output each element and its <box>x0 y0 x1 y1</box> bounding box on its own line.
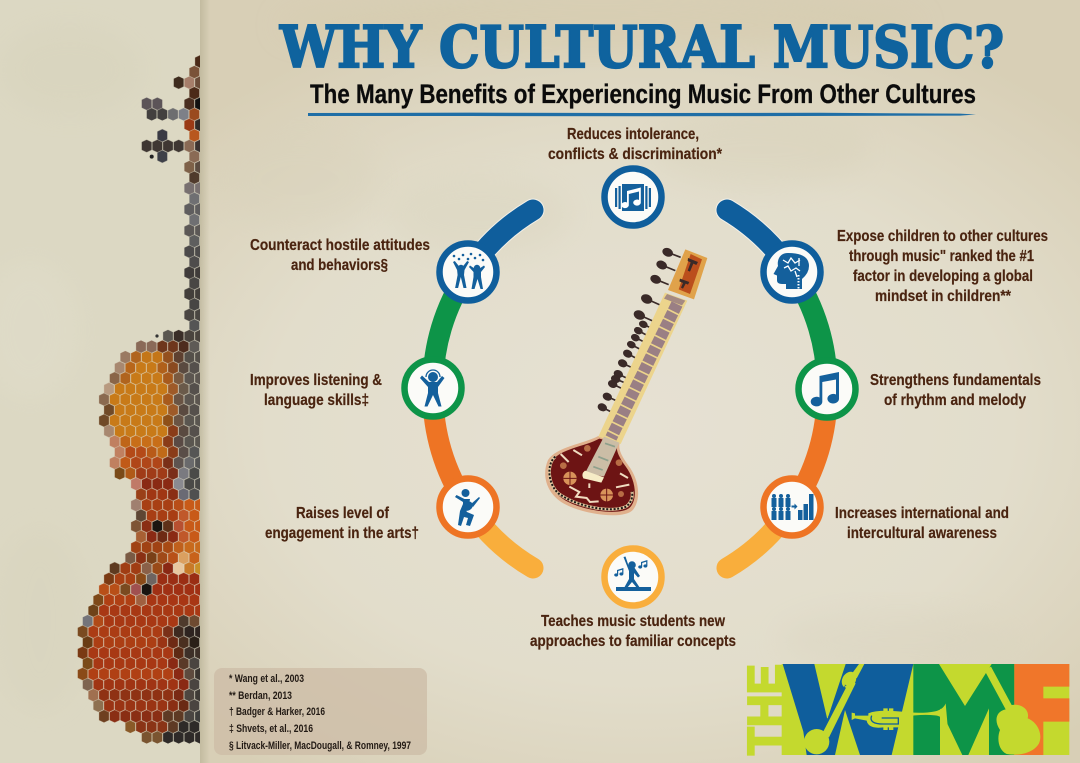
neck <box>598 293 687 444</box>
text: improves listening: Improves listening & <box>250 372 382 389</box>
text: improves listening <box>250 372 382 409</box>
text: raises engagement: engagement in the arts† <box>265 525 419 542</box>
text: increases awareness: Increases international and <box>835 505 1009 522</box>
text: strengthens fundamentals: of rhythm and melody <box>884 392 1026 409</box>
icon: head with brain <box>764 244 820 300</box>
text: improves listening: language skills‡ <box>264 392 369 409</box>
icon: music note <box>798 360 856 418</box>
references panel: ‡ Shvets, et al., 2016 <box>229 723 313 735</box>
text: strengthens fundamentals <box>870 372 1041 409</box>
logo: F <box>1014 664 1069 755</box>
logo: guitar <box>984 667 1040 755</box>
text: raises engagement <box>265 505 419 542</box>
text: counteract hostile attitudes <box>250 237 430 274</box>
text: reduces intolerance: Reduces intolerance, <box>567 126 699 143</box>
references panel: ** Berdan, 2013 <box>229 690 292 702</box>
sitar illustration <box>545 247 707 515</box>
text: expose children: mindset in children** <box>875 288 1012 305</box>
text: reduces intolerance <box>548 126 723 163</box>
text: expose children: factor in developing a global <box>853 268 1033 285</box>
references panel: § Litvack-Miller, MacDougall, & Romney, 1997 <box>229 740 411 752</box>
text: teaches music students: Teaches music students new <box>541 613 725 630</box>
logo: banjo <box>804 664 864 754</box>
background: left strip <box>0 0 200 763</box>
neck decoration <box>585 437 619 477</box>
body ornaments <box>560 445 624 501</box>
text: counteract hostile attitudes: Counteract hostile attitudes <box>250 237 430 254</box>
text: teaches music students <box>530 613 736 650</box>
icon: dancer with notes <box>604 548 662 606</box>
head <box>668 249 707 299</box>
subtitle underline <box>308 113 976 116</box>
violin made of hexagons <box>77 62 206 737</box>
text: reduces intolerance: conflicts & discrimination* <box>548 146 723 163</box>
text: increases awareness <box>835 505 1009 542</box>
text: expose children: through music" ranked the #1 <box>849 248 1034 265</box>
icon: guitar player <box>440 478 496 536</box>
title: WHY CULTURAL MUSIC? <box>279 14 1004 81</box>
text: teaches music students: approaches to familiar concepts <box>530 633 736 650</box>
tuning pegs <box>597 247 681 412</box>
sitar body <box>545 436 638 515</box>
icon: two people raising arms <box>440 244 496 300</box>
logo: The WMF <box>739 664 1069 755</box>
icon: people to bar chart <box>764 478 820 536</box>
icon: person with headphones <box>404 360 462 416</box>
text: strengthens fundamentals: Strengthens fundamentals <box>870 372 1041 389</box>
text: raises engagement: Raises level of <box>296 505 390 522</box>
logo: THE letters: THE <box>739 664 793 755</box>
references panel: † Badger & Harker, 2016 <box>229 706 325 718</box>
body border band <box>549 457 632 509</box>
text: expose children <box>837 228 1048 305</box>
logo: lime backing <box>782 664 1069 755</box>
ring: blue, green, orange and amber arcs <box>433 210 827 568</box>
references panel <box>214 668 427 755</box>
references panel: * Wang et al., 2003 <box>229 673 304 685</box>
logo: trumpet <box>852 703 948 730</box>
text: increases awareness: intercultural awareness <box>847 525 997 542</box>
bridge <box>582 471 604 483</box>
logo: W <box>783 664 913 755</box>
icon: album with music note <box>604 168 662 226</box>
text: counteract hostile attitudes: and behaviors§ <box>291 257 388 274</box>
logo: M <box>913 664 1014 755</box>
